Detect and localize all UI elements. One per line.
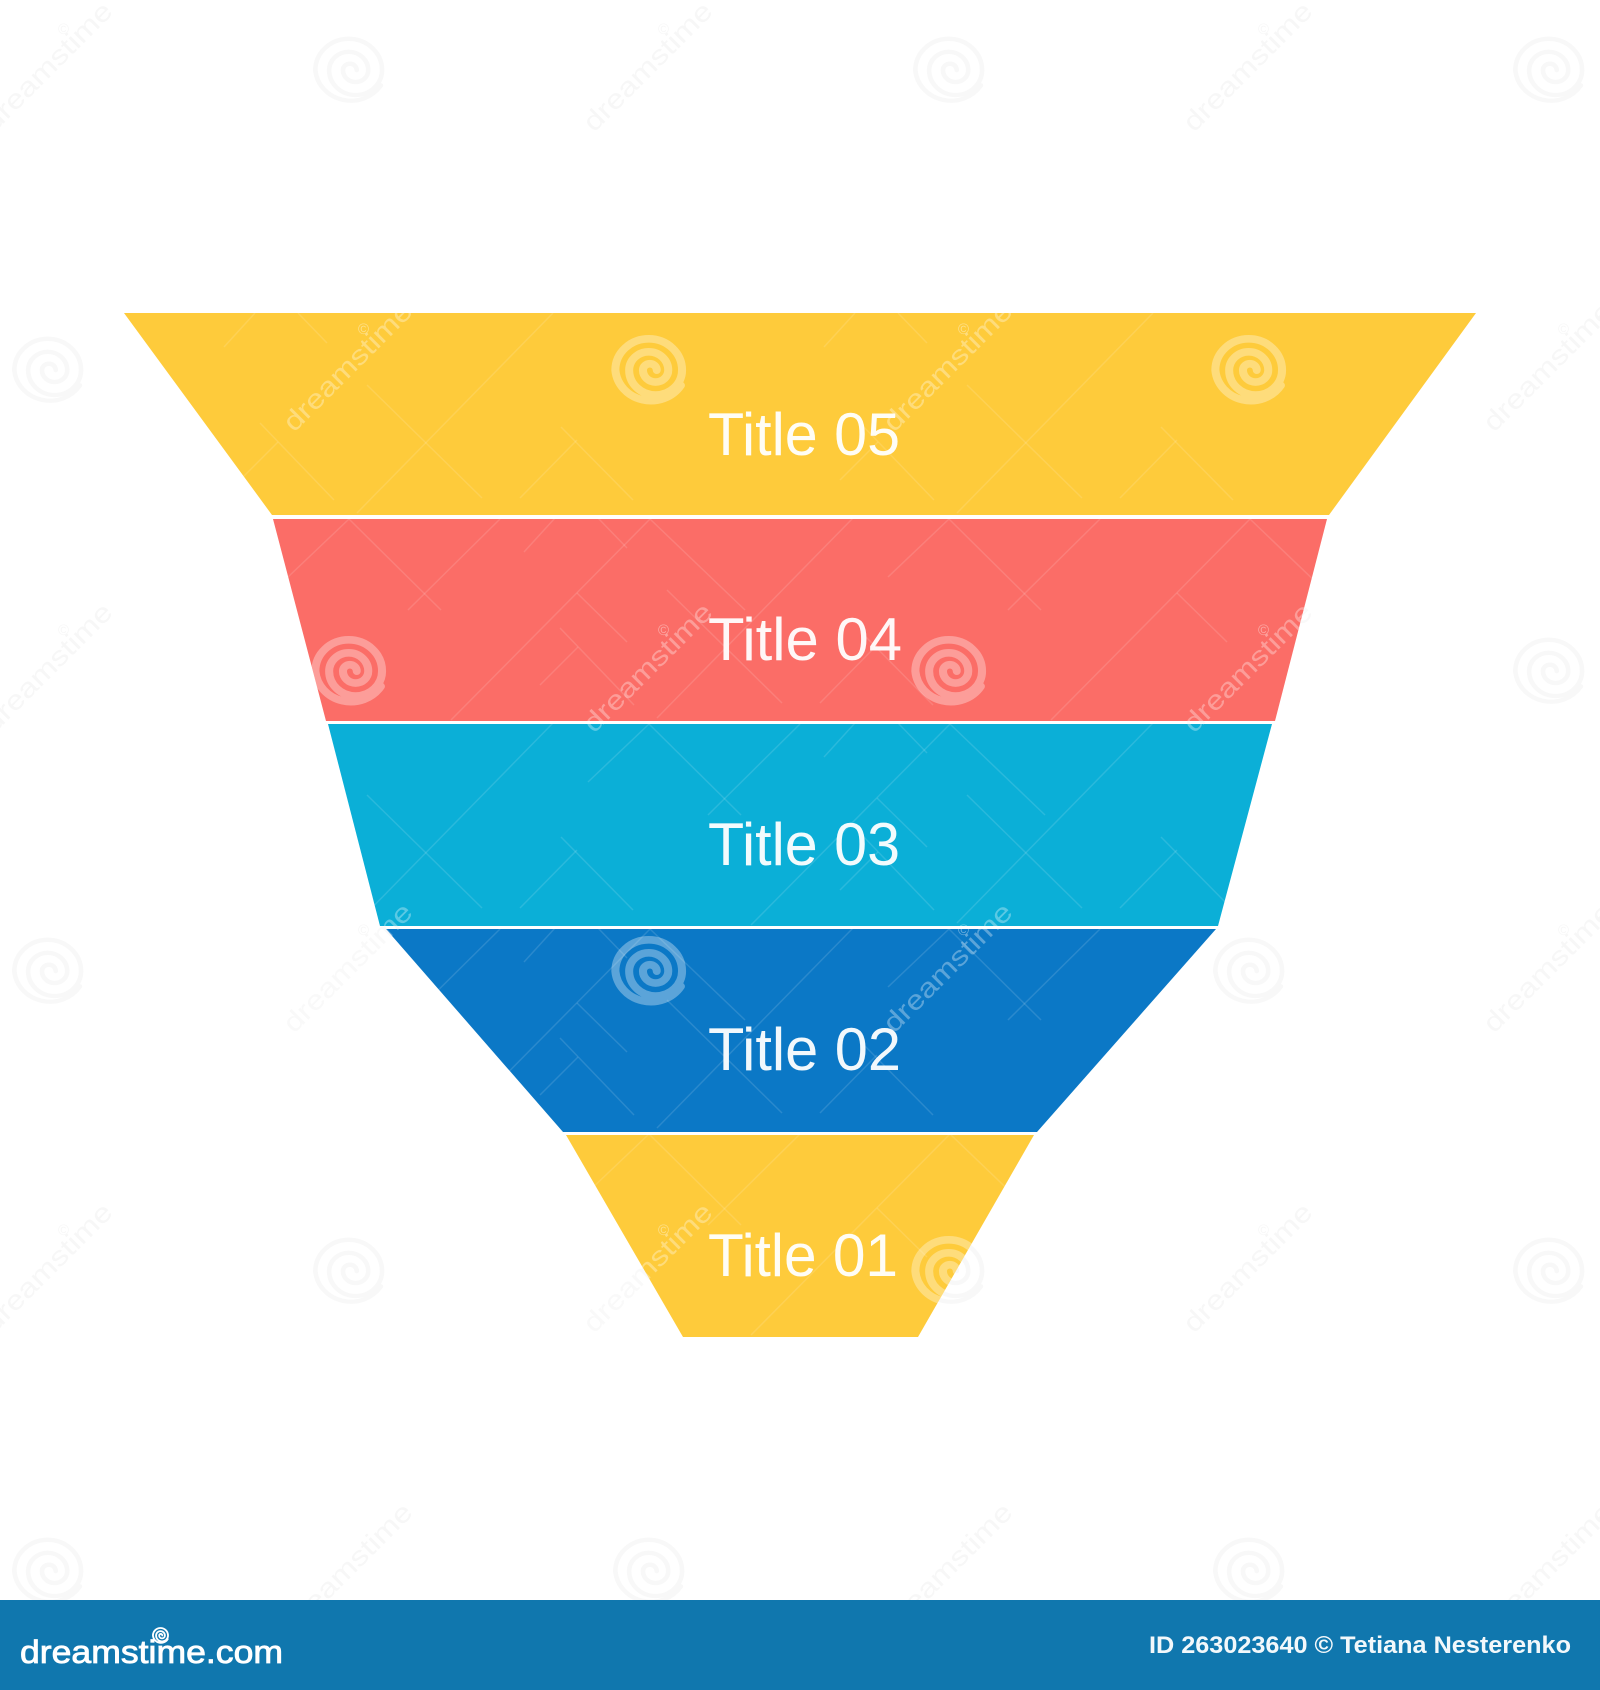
watermark on white background: dreamstime	[277, 897, 418, 1038]
watermark on white background: ©	[658, 21, 669, 38]
watermark overlay on funnel: ©	[1258, 622, 1269, 639]
watermark on white background: dreamstime	[1177, 1197, 1318, 1338]
funnel chart	[124, 313, 1476, 1337]
watermark on white background: dreamstime	[577, 1197, 718, 1338]
watermark on white background: ©	[1558, 321, 1569, 338]
funnel band: Title 01: Title 01	[708, 1222, 898, 1289]
watermark on white background: dreamstime	[277, 1497, 418, 1638]
funnel band: Title 02	[386, 929, 1216, 1132]
watermark on white background: ©	[1558, 922, 1569, 939]
watermark on white background: ©	[58, 622, 69, 639]
watermark overlay on funnel: dreamstime	[1177, 597, 1318, 738]
watermark overlay on funnel	[224, 313, 1312, 1336]
funnel band: Title 05: Title 05	[708, 401, 900, 468]
watermark overlay on funnel: ©	[958, 922, 969, 939]
funnel band: Title 03	[328, 724, 1272, 926]
watermark on white background: dreamstime	[1177, 0, 1318, 137]
watermark overlay on funnel: ©	[658, 622, 669, 639]
footer logo text: dreamstime.com	[20, 1634, 283, 1670]
watermark on white background: dreamstime	[1477, 897, 1600, 1038]
watermark overlay on funnel: ©	[958, 321, 969, 338]
watermark on white background: ©	[58, 21, 69, 38]
watermark on white background: dreamstime	[1477, 1497, 1600, 1638]
watermark on white background: dreamstime	[577, 0, 718, 137]
watermark on white background: ©	[1258, 1222, 1269, 1239]
watermark overlay on funnel: dreamstime	[877, 897, 1018, 1038]
watermark on white background: ©	[358, 922, 369, 939]
watermark on white background: dreamstime	[877, 1497, 1018, 1638]
watermark overlay on funnel: dreamstime	[877, 296, 1018, 437]
watermark on white background: ©	[1258, 21, 1269, 38]
watermark overlay on funnel: ©	[358, 321, 369, 338]
watermark overlay on funnel: ©	[658, 1222, 669, 1239]
funnel band: Title 05	[124, 313, 1476, 515]
watermark overlay on funnel: dreamstime	[277, 296, 418, 437]
icon: footer logo spiral	[153, 1628, 168, 1643]
footer credit: ID 263023640 © Tetiana Nesterenko	[1149, 1632, 1571, 1659]
watermark overlay on funnel: dreamstime	[577, 597, 718, 738]
funnel band: Title 01	[566, 1135, 1034, 1337]
watermark on white background: dreamstime	[1477, 296, 1600, 437]
funnel band: Title 04	[273, 519, 1327, 721]
watermark on white background: ©	[58, 1222, 69, 1239]
watermark overlay on funnel: dreamstime	[577, 1197, 718, 1338]
funnel band: Title 03: Title 03	[708, 811, 900, 878]
watermark overlay on funnel: dreamstime	[277, 897, 418, 1038]
footer bar	[0, 1600, 1600, 1690]
funnel band: Title 04: Title 04	[708, 606, 902, 673]
watermark on white background: dreamstime	[1177, 597, 1318, 738]
funnel band: Title 02: Title 02	[708, 1016, 901, 1083]
